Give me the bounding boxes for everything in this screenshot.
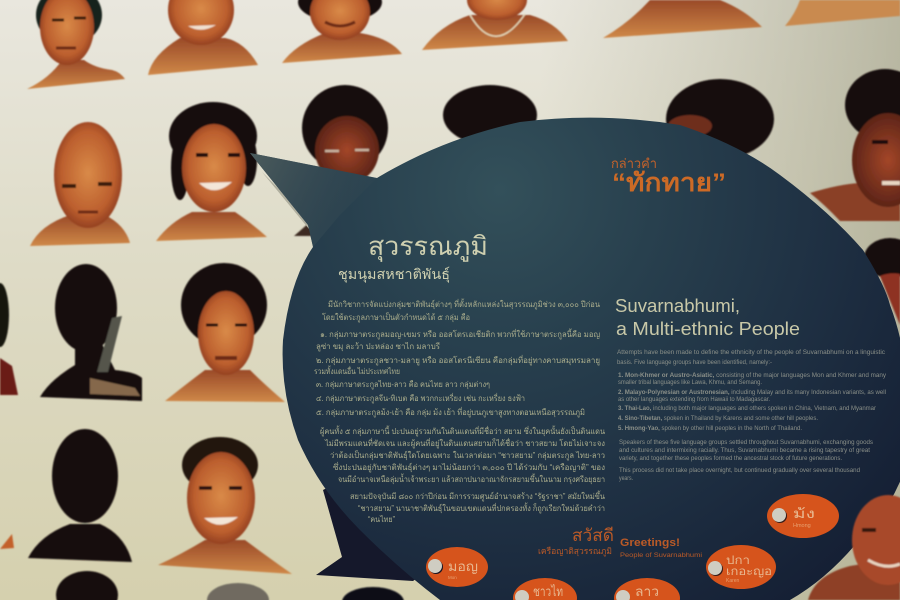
speech tail highlight (250, 153, 377, 247)
English body text: 2. Malayo-Polynesian or Austronesian, including Malay and its many Indonesian variants, as well (618, 389, 886, 396)
English body text: basis. Five language groups have been identified, namely:- (617, 359, 772, 366)
Thai body: ว่าต้องเป็นกลุ่มชาติพันธุ์ใดโดยเฉพาะ ในเวลาต่อมา “ชาวสยาม” กลุ่มตระกูล ไทย-ลาว (330, 450, 605, 461)
Thai body: โดยใช้ตระกูลภาษาเป็นตัวกำหนดได้ ๕ กลุ่ม คือ (322, 312, 470, 323)
speech bubble panel (250, 118, 900, 600)
English body text: as other languages extending from Hawaii to Madagascar. (618, 396, 770, 403)
Thai body: รวมทั้งแดนอื่น ไม่ประเทศไทย (314, 365, 400, 376)
Thai body: ๕. กลุ่มภาษาตระกูลม้ง-เย้า คือ กลุ่ม ม้ง เย้า ที่อยู่บนภูเขาสูงทางตอนเหนือสุวรรณภูมิ (316, 406, 585, 418)
button: Hmong: ม้ง (793, 506, 815, 521)
button: Hmong (767, 494, 839, 538)
button: Karen: ปกา (726, 555, 750, 567)
English body text: 1. Mon-Khmer or Austro-Asiatic, consisting of the major languages Mon and Khmer and many (618, 372, 887, 379)
English title (615, 296, 800, 339)
English greeting: Greetings! (620, 537, 680, 549)
English body text: 3. Thai-Lao, including both major languages and others spoken in China, Vietnam, and Myanmar (618, 405, 876, 412)
English body text: 5. Hmong-Yao, spoken by other hill peoples in the North of Thailand. (618, 425, 802, 432)
bottom right child portrait (808, 495, 900, 600)
Thai body: จนมีอำนาจเหนือลุ่มน้ำเจ้าพระยา แล้วสถาปนาอาณาจักรสยามขึ้นในนาม กรุงศรีอยุธยา (338, 473, 605, 484)
Thai body: ๓. กลุ่มภาษาตระกูลไทย-ลาว คือ คนไทย ลาว กลุ่มต่างๆ (316, 380, 490, 390)
English title: Suvarnabhumi, (615, 296, 740, 316)
button: Chao Thai (513, 578, 577, 600)
Thai body: สยามปัจจุบันมี ๘๐๐ กว่าปีก่อน มีการรวมศูนย์อำนาจสร้าง “รัฐราชา” สมัยใหม่ขึ้น (350, 490, 605, 502)
English greeting sub: People of Suvarnabhumi (620, 552, 702, 559)
portrait row 3 (0, 263, 285, 402)
English body text: 4. Sino-Tibetan, spoken in Thailand by Karens and some other hill peoples. (618, 415, 818, 422)
English body text: This process did not take place overnight, but continued gradually over several thousand (619, 467, 861, 474)
button: Mon (426, 547, 488, 587)
English body text: smaller tribal languages like Lawa, Khmu, and Semang. (618, 379, 762, 386)
Thai body: ๔. กลุ่มภาษาตระกูลจีน-ทิเบต คือ พวกกะเหรี่ยง เช่น กะเหรี่ยง ธงฟ้า (316, 392, 525, 404)
greeting large: “ทักทาย” (612, 169, 726, 197)
English body text: Speakers of these five language groups settled throughout Suvarnabhumi, exchanging goods (619, 439, 873, 446)
English title: a Multi-ethnic People (616, 319, 800, 339)
Thai body: “ชาวสยาม” นานาชาติพันธุ์ในขอบเขตแดนที่ปกครองทั้ง ก็ถูกเรียกใหม่ด้วยคำว่า (358, 502, 605, 514)
portrait row 1 (27, 0, 900, 89)
button: Mon: Mon (448, 575, 457, 580)
button: Mon: มอญ (448, 559, 478, 574)
button: Hmong: Hmong (793, 523, 811, 529)
Thai body: ไม่มีพรมแดนที่ชัดเจน และผู้คนที่อยู่ในดินแดนสยามก็ได้ชื่อว่า ชาวสยาม โดยไม่เจาะจง (324, 437, 605, 449)
Thai body (314, 298, 605, 524)
English body text: variety, and together these peoples formed the ancestral stock of future generations. (619, 455, 842, 462)
Thai greeting sub: เครือญาติสุวรรณภูมิ (538, 546, 612, 557)
Thai body: “คนไทย” (368, 515, 395, 524)
button: Chao Thai: ชาวไท (533, 584, 563, 599)
button: Karen: เกอะญอ (726, 566, 772, 578)
button: Lao: ลาว (635, 584, 659, 599)
button: Karen: Karen (726, 578, 740, 584)
English body text (617, 349, 887, 482)
portrait row 2 (30, 69, 900, 325)
Thai subtitle: ชุมนุมสหชาติพันธุ์ (338, 266, 450, 283)
Thai body: ๒. กลุ่มภาษาตระกูลชวา-มลายู หรือ ออสโตรนีเซียน คือกลุ่มที่อยู่ทางคาบสมุทรมลายู (316, 354, 600, 366)
Thai body: ผู้คนทั้ง ๕ กลุ่มภาษานี้ ปะปนอยู่รวมกันในดินแดนที่มีชื่อว่า สยาม ซึ่งในยุคนั้นยังเป็นดินแดน (320, 425, 605, 437)
greeting small: กล่าวคำ (611, 156, 657, 171)
button: Karen (706, 545, 776, 589)
Thai body: ๑. กลุ่มภาษาตระกูลมอญ-เขมร หรือ ออสโตรเอเชียติก พวกที่ใช้ภาษาตระกูลนี้คือ มอญ (320, 328, 600, 340)
tail shadow on wall (262, 172, 318, 240)
Thai text block (314, 231, 605, 524)
portrait row 5 (56, 571, 404, 600)
Thai body: มีนักวิชาการจัดแบ่งกลุ่มชาติพันธุ์ต่างๆ ที่ตั้งหลักแหล่งในสุวรรณภูมิช่วง ๓,๐๐๐ ปีก่อน (328, 298, 600, 310)
lower speech tail shadow (316, 450, 470, 581)
greeting heading (611, 156, 726, 197)
Thai body: ซึ่งปะปนอยู่กับชาติพันธุ์ต่างๆ มาไม่น้อยกว่า ๓,๐๐๐ ปี ได้ร่วมกับ “เครือญาติ” ของ (333, 461, 605, 473)
English body text: Attempts have been made to define the ethnicity of the people of Suvarnabhumi on a linguistic (617, 349, 885, 356)
Thai body: ลูซ่า ขมุ ละว้า ปะหล่อง ซาไก มลาบรี (316, 342, 441, 352)
Thai title: สุวรรณภูมิ (368, 231, 488, 262)
Thai greeting: สวัสดี (572, 526, 614, 545)
portrait row 4 (0, 429, 292, 574)
button: Lao (614, 578, 680, 600)
English body text: and cultures and intermixing racially. Thus, Suvarnabhumi became a rising tapestry of great (619, 447, 870, 454)
English body text: years. (619, 475, 633, 482)
greetings captions (538, 526, 702, 559)
